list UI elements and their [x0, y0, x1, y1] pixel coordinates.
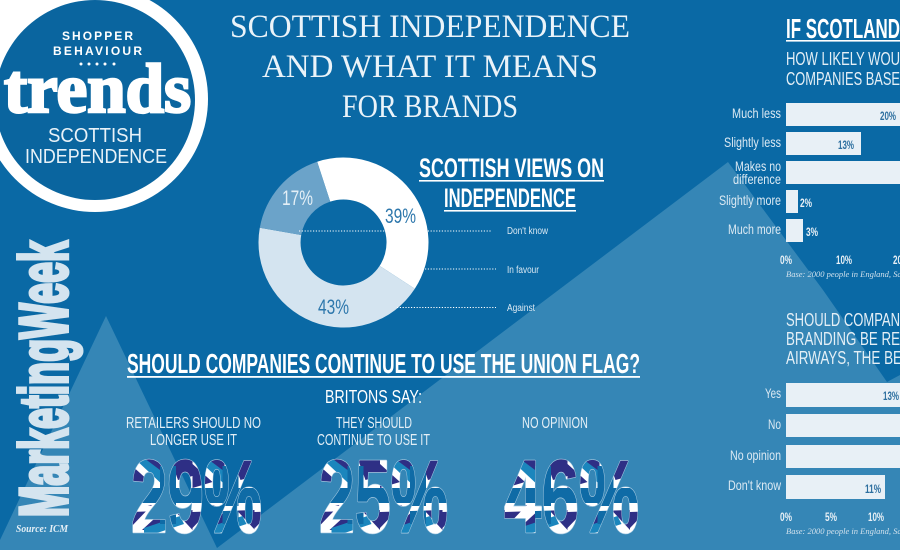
stat: retailers should no longer use it 29%: [126, 415, 262, 550]
bar chart: branding: Don't know: [728, 477, 782, 493]
badge: shopper behaviour trends: INDEPENDENCE: [25, 146, 167, 168]
bar chart: how likely: 3%: [806, 225, 818, 239]
mountains background: [0, 162, 900, 550]
bar chart: branding: Yes: [765, 385, 781, 401]
donut chart: Scottish views: 43%: [318, 296, 349, 319]
stat: no opinion 46%: [504, 415, 639, 550]
donut leader lines and legend: Against: [507, 303, 535, 314]
stat: retailers should no longer use it 29%: LONGER USE IT: [150, 432, 237, 449]
bar chart: branding: 10%: [868, 510, 884, 524]
bar chart: branding: No opinion: [730, 447, 781, 463]
bar chart: how likely: [719, 103, 900, 279]
question: should companies branding: [786, 310, 900, 368]
bar chart: branding: 5%: [825, 510, 837, 524]
donut leader lines and legend: Don't know: [507, 226, 549, 237]
subheading: Britons say: BRITONS SAY:: [325, 387, 422, 407]
MarketingWeek logo: [6, 241, 82, 535]
bar chart: branding: [728, 383, 900, 536]
donut leader lines and legend: [299, 226, 549, 314]
question: how likely: [786, 49, 900, 89]
MarketingWeek logo: MarketingWeek: [6, 241, 82, 517]
bar chart: how likely: Much less: [732, 105, 781, 121]
title: AND WHAT IT MEANS: [262, 49, 598, 85]
heading: Scottish views on independence: [419, 153, 604, 213]
donut chart: Scottish views: 39%: [385, 205, 416, 228]
heading: Scottish views on independence: SCOTTISH VIEWS ON: [419, 153, 604, 183]
badge: shopper behaviour trends: [0, 0, 208, 212]
bar chart: how likely: Slightly more: [719, 192, 781, 208]
bar chart: how likely: Makes no: [735, 158, 781, 174]
bar chart: how likely: 10%: [836, 253, 852, 267]
badge: shopper behaviour trends: BEHAVIOUR: [53, 44, 142, 58]
bar chart: how likely: difference: [733, 171, 781, 187]
bar chart: how likely: Much more: [728, 221, 781, 237]
donut chart: Scottish views: 17%: [282, 187, 313, 210]
bar chart: branding: 11%: [865, 482, 881, 496]
bar chart: branding: 0%: [780, 510, 792, 524]
stat: they should continue to use it 25%: [317, 415, 448, 550]
heading: Scottish views on independence: INDEPENDENCE: [444, 183, 576, 213]
title: [230, 9, 630, 125]
bar chart: how likely: 13%: [838, 138, 854, 152]
bar chart: how likely: 2%: [800, 196, 812, 210]
stat: retailers should no longer use it 29%: RETAILERS SHOULD NO: [126, 415, 261, 432]
stat: they should continue to use it 25%: CONTINUE TO USE IT: [317, 432, 430, 449]
stat: they should continue to use it 25%: THEY SHOULD: [336, 415, 412, 432]
badge: shopper behaviour trends: SCOTTISH: [48, 125, 142, 147]
title: SCOTTISH INDEPENDENCE: [230, 9, 630, 45]
stat: no opinion 46%: NO OPINION: [522, 415, 588, 432]
bar chart: branding: No: [768, 416, 781, 432]
donut chart: Scottish views: [258, 158, 428, 328]
bar chart: how likely: 0%: [780, 253, 792, 267]
MarketingWeek logo: Source: ICM: [16, 524, 69, 535]
title: FOR BRANDS: [342, 89, 518, 125]
donut leader lines and legend: In favour: [507, 265, 540, 276]
badge: shopper behaviour trends: SHOPPER: [62, 29, 133, 43]
badge: shopper behaviour trends: trends: [4, 51, 191, 128]
bar chart: how likely: Slightly less: [724, 134, 781, 150]
